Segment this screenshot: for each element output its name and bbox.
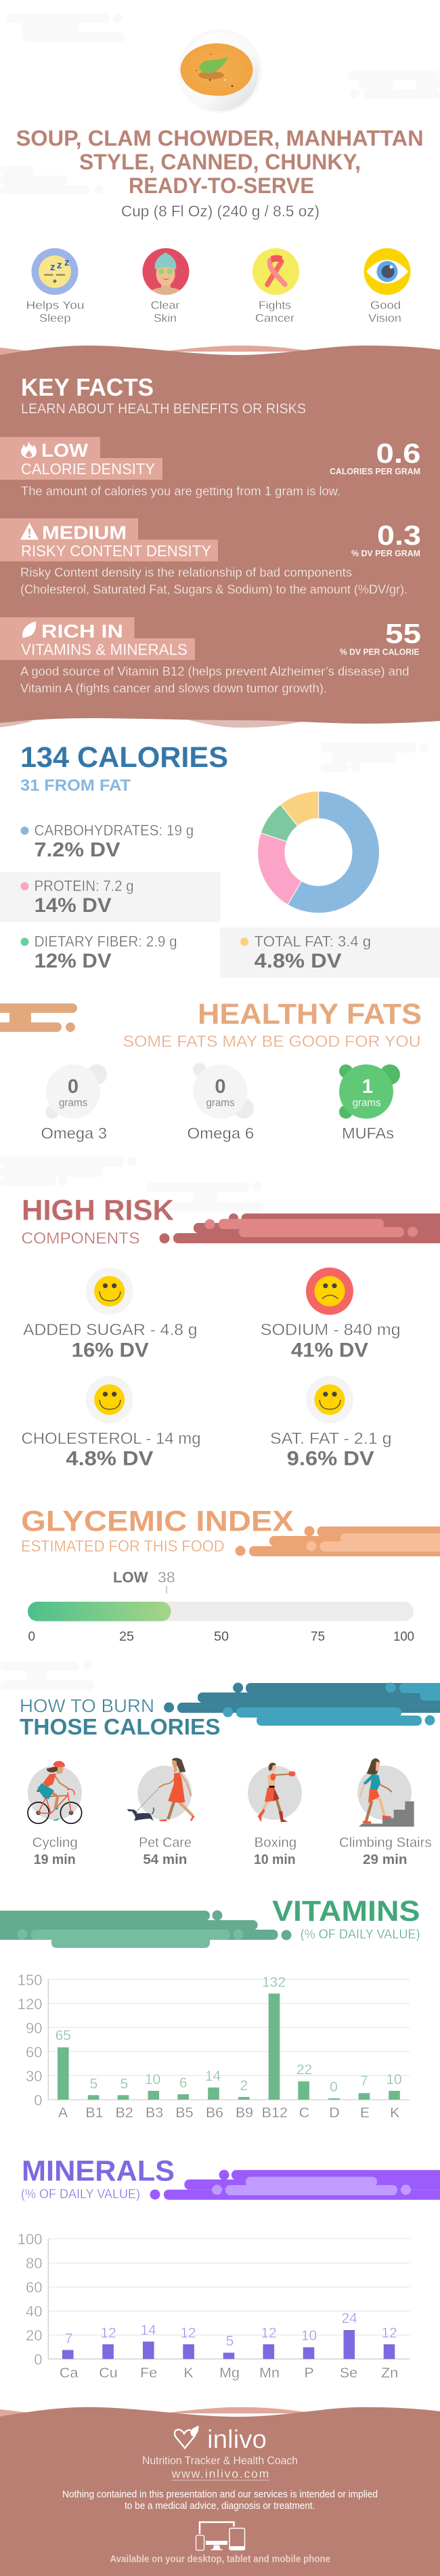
bar chart: vitamins: B1 [85, 2104, 104, 2121]
fact: medium risky content density: (Cholesterol, Saturated Fat, Sugars & Sodium) to the amount (%DV/gr). [20, 583, 408, 596]
label: good vision [368, 299, 401, 325]
label: helps you sleep: Helps You [26, 299, 84, 312]
gauge scale: 50 [214, 1630, 229, 1644]
item: sodium: 41% DV [291, 1339, 368, 1361]
bar chart: minerals: 10 [301, 2328, 317, 2344]
bar chart: minerals: 12 [180, 2325, 196, 2341]
panel: high risk components [22, 1194, 440, 1470]
activity: boxing: 10 min [254, 1852, 296, 1867]
stat: mufas: 1 [362, 1076, 373, 1098]
subheading: from fat: 31 FROM FAT [20, 776, 131, 795]
bar chart: vitamins: B9 [236, 2104, 253, 2121]
subheading: (% OF DAILY VALUE) [301, 1927, 420, 1942]
legend: carbohydrates [20, 822, 194, 861]
label: helps you sleep [26, 299, 84, 325]
item: saturated fat [270, 1376, 391, 1470]
bar chart: vitamins: A [58, 2104, 68, 2121]
bar chart: minerals [18, 2230, 410, 2381]
legend: protein: 14% DV [35, 894, 112, 917]
activity: climbing stairs: 29 min [363, 1852, 408, 1867]
bar chart: vitamins: 120 [18, 1996, 42, 2012]
stat: omega 3 [41, 1064, 107, 1142]
title: SOUP, CLAM CHOWDER, MANHATTAN [16, 126, 424, 150]
stat: omega 3: grams [59, 1098, 87, 1109]
background cloud decorations [0, 14, 440, 1690]
bar chart: vitamins: 90 [26, 2020, 42, 2037]
panel: vitamins [0, 1895, 420, 2121]
activity: climbing stairs [339, 1758, 432, 1867]
banner decoration [0, 1003, 77, 1032]
subheading: ESTIMATED FOR THIS FOOD [21, 1537, 225, 1556]
bar chart: minerals: 14 [140, 2323, 156, 2338]
fact: rich in vitamins and minerals: % DV PER CALORIE [340, 646, 420, 657]
panel: glycemic index [21, 1505, 440, 1644]
disclaimer [62, 2489, 378, 2512]
panel: calories [0, 741, 440, 978]
legend: carbohydrates: 7.2% DV [35, 839, 120, 861]
label: helps you sleep: Sleep [39, 312, 70, 325]
item: cholesterol: CHOLESTEROL - 14 mg [22, 1430, 200, 1448]
bar chart: vitamins: K [390, 2104, 400, 2121]
icon: helps you sleep [31, 248, 79, 295]
bar chart: minerals: 100 [18, 2230, 42, 2248]
icon: fights cancer ribbon [252, 248, 299, 295]
availability note: Available on your desktop, tablet and mobile phone [110, 2554, 330, 2565]
food image: soup bowl [180, 43, 259, 111]
legend: protein: PROTEIN: 7.2 g [35, 877, 134, 894]
activity: cycling: Cycling [32, 1835, 78, 1850]
icon: good vision eye [364, 248, 410, 295]
heading: vitamins: VITAMINS [272, 1895, 420, 1928]
bar chart: minerals: K [183, 2365, 194, 2381]
gauge value: 38 [158, 1569, 175, 1586]
fact: rich in vitamins and minerals: A good source of Vitamin B12 (helps prevent Alzheimer’s disease) and [20, 665, 409, 678]
bar chart: minerals: 0 [34, 2351, 42, 2368]
bar chart: minerals: P [304, 2365, 314, 2381]
activity: climbing stairs: Climbing Stairs [339, 1835, 432, 1850]
bar chart: vitamins: 22 [296, 2062, 312, 2078]
website link: www.inlivo.com [171, 2467, 269, 2480]
activity: boxing: Boxing [255, 1835, 296, 1850]
heading: key facts [21, 373, 306, 417]
gauge scale: 0 [28, 1630, 35, 1644]
fact: medium risky content density: RISKY CONTENT DENSITY [21, 542, 211, 560]
bar chart: vitamins: 2 [240, 2078, 248, 2094]
heading: high risk: HIGH RISK [22, 1194, 174, 1227]
panel: how to burn those calories [20, 1683, 440, 1867]
bar chart: minerals: Mg [219, 2365, 240, 2381]
fact: rich in vitamins and minerals: RICH IN [41, 621, 123, 642]
gauge scale: 25 [119, 1630, 134, 1644]
icon: clear skin [142, 248, 190, 295]
disclaimer: to be a medical advice, diagnosis or treatment. [125, 2500, 315, 2512]
bar chart: vitamins: 30 [26, 2068, 42, 2085]
fact: rich in vitamins and minerals [0, 617, 421, 695]
activity: pet care: Pet Care [139, 1835, 192, 1850]
bar chart: vitamins: B2 [116, 2104, 133, 2121]
heading: glycemic index: GLYCEMIC INDEX [21, 1505, 294, 1537]
label: clear skin [151, 299, 180, 325]
item: cholesterol: 4.8% DV [66, 1447, 153, 1470]
gauge scale: 100 [393, 1630, 414, 1644]
bar chart: minerals: 60 [26, 2279, 42, 2295]
icon: helps you sleep: z [57, 259, 62, 271]
item: sodium: SODIUM - 840 mg [261, 1321, 401, 1339]
activity: boxing [248, 1763, 302, 1867]
icon: helps you sleep: z [64, 257, 69, 268]
label: clear skin: Skin [154, 312, 177, 325]
bar chart: vitamins: 0 [34, 2092, 42, 2108]
heading: key facts: KEY FACTS [21, 373, 154, 401]
bar chart: minerals: 12 [100, 2325, 116, 2341]
stat: mufas [339, 1064, 400, 1142]
stat: omega 6 [187, 1063, 254, 1142]
legend: total fat [220, 928, 440, 978]
gauge value [113, 1569, 175, 1594]
bar chart: vitamins: C [299, 2104, 309, 2121]
panel: footer [0, 2407, 440, 2576]
legend: carbohydrates: CARBOHYDRATES: 19 g [35, 822, 194, 839]
bar chart: vitamins: 0 [330, 2079, 338, 2095]
bar chart: minerals: Cu [99, 2365, 118, 2381]
panel: healthy fats [0, 998, 422, 1142]
bar chart: minerals: Mn [259, 2365, 280, 2381]
banner decoration [0, 1911, 291, 1948]
bar chart: minerals: 80 [26, 2255, 42, 2272]
fact: low calorie density [0, 437, 421, 498]
bar chart: minerals: Ca [60, 2365, 78, 2381]
icon: devices [196, 2522, 245, 2550]
heading: key facts: LEARN ABOUT HEALTH BENEFITS OR RISKS [21, 401, 306, 417]
label: fights cancer: Fights [259, 299, 291, 312]
banner decoration [164, 1683, 440, 1726]
fact: low calorie density: LOW [41, 440, 89, 461]
bar chart: vitamins: 10 [386, 2072, 402, 2087]
bar chart: minerals: 40 [26, 2303, 42, 2320]
bar chart: vitamins: 132 [262, 1975, 286, 1991]
heading: those calories: THOSE CALORIES [20, 1714, 221, 1739]
subheading: components: COMPONENTS [22, 1230, 139, 1248]
bar chart: vitamins: B6 [206, 2104, 223, 2121]
subheading: (% OF DAILY VALUE) [21, 2186, 140, 2201]
serving size: Cup (8 Fl Oz) (240 g / 8.5 oz) [121, 202, 320, 220]
fact: medium risky content density: Risky Content density is the relationship of bad components [20, 566, 352, 579]
logo: inlivo [175, 2426, 267, 2454]
bar chart: minerals: 24 [341, 2311, 357, 2327]
legend: total fat: TOTAL FAT: 3.4 g [255, 933, 371, 950]
fact: low calorie density: The amount of calories you are getting from 1 gram is low. [21, 484, 340, 498]
bar chart: minerals: 5 [226, 2333, 234, 2349]
disclaimer: Nothing contained in this presentation and our services is intended or implied [62, 2489, 378, 2500]
bar chart: vitamins: B5 [175, 2104, 194, 2121]
label: fights cancer: Cancer [255, 312, 294, 325]
legend: protein [0, 872, 221, 922]
fact: rich in vitamins and minerals: Vitamin A (fights cancer and slows down tumor growth). [20, 682, 327, 695]
panel: key facts [0, 346, 440, 728]
legend: total fat: 4.8% DV [255, 950, 342, 972]
activity: cycling [28, 1761, 82, 1867]
title [16, 126, 424, 198]
heading: 134 calories: 134 CALORIES [20, 741, 228, 774]
bar chart: vitamins: 65 [56, 2028, 71, 2043]
bar chart: vitamins: 60 [26, 2043, 42, 2061]
bar chart: minerals: 20 [26, 2327, 42, 2344]
gauge bar [28, 1602, 414, 1621]
label: good vision: Good [370, 299, 401, 312]
icon: warning triangle [20, 523, 39, 539]
subheading: SOME FATS MAY BE GOOD FOR YOU [123, 1033, 421, 1051]
banner decoration [160, 1213, 440, 1243]
item: cholesterol [22, 1376, 200, 1470]
bar chart: vitamins: 5 [90, 2077, 97, 2092]
bar chart: vitamins: 7 [360, 2073, 368, 2089]
activity: cycling: 19 min [34, 1852, 76, 1867]
bar chart: vitamins: 10 [145, 2072, 160, 2087]
fact: rich in vitamins and minerals: VITAMINS & MINERALS [21, 641, 188, 659]
fact: low calorie density: CALORIES PER GRAM [330, 466, 420, 476]
label: clear skin: Clear [151, 299, 180, 312]
fact: medium risky content density [0, 518, 421, 596]
panel: minerals [18, 2155, 440, 2381]
stat: omega 6: Omega 6 [187, 1125, 254, 1142]
icon: flame [21, 441, 37, 458]
stat: omega 3: 0 [68, 1076, 79, 1098]
bar chart: vitamins: D [329, 2104, 340, 2121]
tagline: Nutrition Tracker & Health Coach [142, 2454, 298, 2467]
stat: omega 6: 0 [215, 1076, 226, 1098]
bar chart: vitamins: 150 [18, 1972, 42, 1989]
legend: dietary fiber [20, 933, 177, 972]
icon: leaf [22, 621, 36, 638]
heading: healthy fats: HEALTHY FATS [198, 998, 422, 1031]
donut chart [258, 791, 379, 913]
legend: dietary fiber: DIETARY FIBER: 2.9 g [35, 933, 177, 950]
bar chart: vitamins: 14 [205, 2069, 221, 2084]
gauge scale [28, 1630, 414, 1644]
item: added sugar: ADDED SUGAR - 4.8 g [23, 1321, 198, 1339]
fact: medium risky content density: MEDIUM [42, 522, 127, 543]
bar chart: vitamins [18, 1972, 410, 2121]
stat: omega 6: grams [206, 1098, 234, 1109]
bar chart: vitamins: B12 [262, 2104, 288, 2121]
bar chart: minerals: Se [340, 2365, 357, 2381]
bar chart: vitamins: E [360, 2104, 370, 2121]
fact: medium risky content density: 0.3 [377, 520, 421, 551]
label: good vision: Vision [368, 312, 401, 325]
bar chart: minerals: 12 [261, 2325, 277, 2341]
item: saturated fat: 9.6% DV [287, 1447, 374, 1470]
banner decoration [236, 1526, 440, 1556]
heading: minerals: MINERALS [22, 2155, 175, 2187]
title: STYLE, CANNED, CHUNKY, [79, 150, 361, 174]
icon: helps you sleep: z [50, 262, 56, 273]
bar chart: minerals: Zn [381, 2365, 398, 2381]
gauge value: LOW [113, 1569, 148, 1586]
stat: mufas: grams [352, 1098, 380, 1109]
stat: omega 3: Omega 3 [41, 1125, 107, 1142]
fact: medium risky content density: % DV PER GRAM [351, 548, 420, 558]
bar chart: minerals: 12 [381, 2325, 397, 2341]
bar chart: minerals: Fe [140, 2365, 157, 2381]
fact: low calorie density: 0.6 [376, 438, 421, 469]
title: READY-TO-SERVE [129, 173, 314, 198]
label: fights cancer [255, 299, 294, 325]
gauge scale: 75 [311, 1630, 325, 1644]
benefit icons row [26, 248, 410, 325]
bar chart: minerals: 7 [65, 2331, 72, 2346]
bar chart: vitamins: B3 [146, 2104, 163, 2121]
legend: dietary fiber: 12% DV [35, 950, 112, 972]
bar chart: vitamins: 5 [120, 2077, 128, 2092]
activity: pet care [127, 1758, 195, 1867]
logo: inlivo: inlivo [207, 2426, 267, 2454]
item: added sugar [23, 1268, 198, 1361]
fact: low calorie density: CALORIE DENSITY [21, 460, 155, 478]
bar chart: vitamins: 6 [179, 2075, 188, 2091]
item: sodium [261, 1268, 401, 1361]
banner decoration [150, 2169, 440, 2200]
activity: pet care: 54 min [143, 1852, 187, 1867]
fact: rich in vitamins and minerals: 55 [385, 618, 421, 649]
heading: how to burn: HOW TO BURN [20, 1695, 154, 1716]
stat: mufas: MUFAs [342, 1125, 394, 1142]
item: added sugar: 16% DV [72, 1339, 149, 1361]
item: saturated fat: SAT. FAT - 2.1 g [270, 1430, 391, 1448]
